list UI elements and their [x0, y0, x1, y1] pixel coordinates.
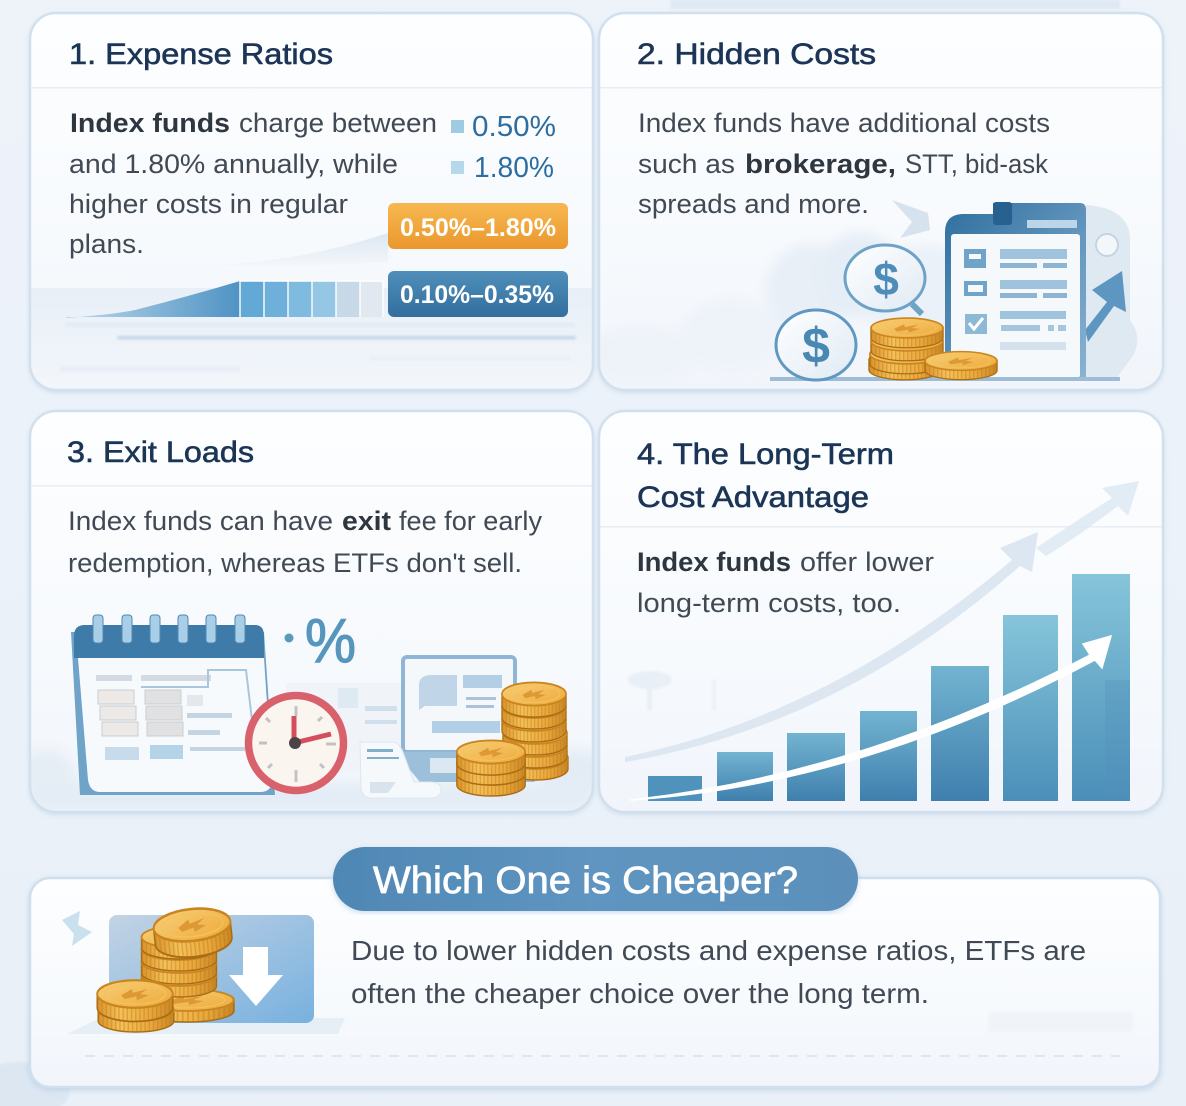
body text — [69, 108, 437, 259]
heading: 4. The Long-Term — [637, 438, 894, 471]
body text: Index funds have additional costs — [638, 108, 1050, 138]
panel: expense ratios — [30, 13, 593, 390]
body text: Due to lower hidden costs and expense ratios, ETFs are — [351, 935, 1086, 966]
bar chart — [648, 574, 1130, 801]
body text: Index funds — [70, 108, 230, 138]
trend arrow — [630, 636, 1111, 800]
body text: long-term costs, too. — [637, 588, 901, 618]
icon: ground line — [770, 377, 1120, 381]
icon: calendar — [71, 615, 275, 795]
legend: 1.80% — [474, 152, 554, 184]
decorative ground — [67, 1018, 345, 1034]
legend: 0.50% — [472, 111, 556, 143]
panel: which one is cheaper — [30, 878, 1160, 1087]
body text: redemption, whereas ETFs don't sell. — [68, 548, 522, 578]
icon: clipboard — [945, 202, 1086, 380]
icon: laptop — [395, 657, 535, 782]
cost ramp — [66, 281, 383, 318]
legend — [451, 111, 556, 184]
heading line two: Cost Advantage — [637, 481, 869, 514]
faint details — [988, 1012, 1133, 1032]
body text: offer lower — [800, 547, 934, 577]
body text: and 1.80% annually, while — [69, 149, 398, 179]
icon: percent — [284, 607, 356, 676]
badge: regular plans: 0.50%–1.80% — [400, 214, 556, 242]
body text: spreads and more. — [638, 189, 869, 219]
body text: exit — [342, 506, 391, 536]
body text: fee for early — [399, 506, 542, 536]
body text: such as — [638, 149, 735, 179]
icon: receipt — [360, 742, 441, 798]
icon: gauge — [1096, 234, 1118, 256]
icon: dollar coin: $ — [802, 318, 830, 374]
badge: direct plans: 0.10%–0.35% — [400, 281, 554, 309]
banner: which one is cheaper — [333, 847, 858, 911]
body text: often the cheaper choice over the long term. — [351, 978, 929, 1009]
icon: tall coin stack — [502, 682, 568, 780]
body text: plans. — [69, 229, 144, 259]
icon: magnifier dollar: $ — [873, 253, 899, 305]
panel: long-term cost advantage — [599, 411, 1163, 812]
heading: 3. Exit Loads — [67, 436, 254, 469]
heading: 2. Hidden Costs — [637, 38, 876, 71]
body text: Index funds can have — [68, 506, 333, 536]
icon: dollar coin — [776, 310, 856, 380]
panel: hidden costs — [585, 13, 1163, 390]
body text: charge between — [239, 108, 437, 138]
icon: growth arrow — [1085, 271, 1126, 342]
icon: magnifier dollar — [845, 245, 925, 314]
heading: 1. Expense Ratios — [69, 38, 333, 71]
body text: STT, bid-ask — [905, 149, 1048, 179]
pale background arrow — [625, 481, 1139, 762]
icon: sparkle — [62, 911, 92, 946]
icon: documents behind — [286, 683, 401, 773]
icon: short coin stack — [457, 740, 525, 796]
body text — [638, 108, 1050, 219]
panel: exit loads — [15, 411, 610, 812]
body text: Index funds — [637, 547, 791, 577]
icon: clock — [248, 696, 344, 790]
body text: brokerage, — [745, 149, 896, 179]
icon: down-arrow box — [109, 915, 314, 1023]
body text — [68, 506, 542, 578]
body text: higher costs in regular — [69, 189, 348, 219]
badge: direct plans — [388, 271, 568, 317]
badge: regular plans — [388, 203, 568, 249]
body text — [351, 935, 1086, 1009]
icon: coin pile — [97, 905, 234, 1032]
dashed divider — [85, 1055, 1120, 1057]
banner: which one is cheaper: Which One is Cheaper? — [373, 860, 798, 902]
icon: percent: % — [305, 607, 356, 676]
icon: pointer arrow — [892, 200, 930, 238]
icon: coin stack — [869, 318, 997, 380]
body text — [637, 547, 934, 618]
